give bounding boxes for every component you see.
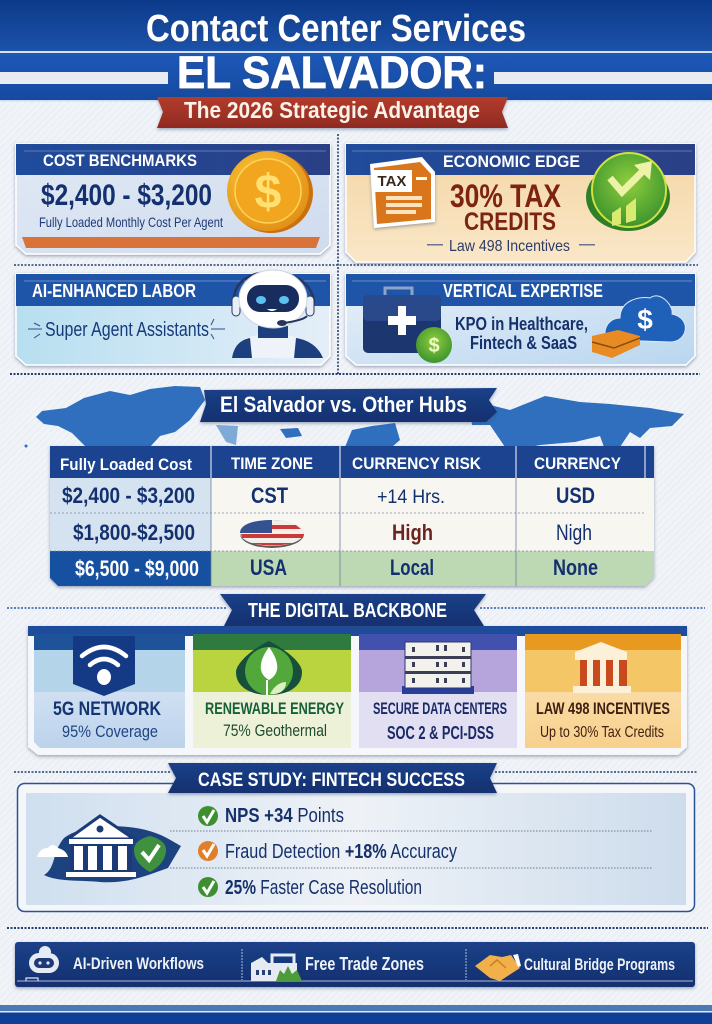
- expertise text line two: Fintech & SaaS: [470, 333, 577, 353]
- icon: tax document: TAX: [378, 173, 406, 190]
- card: secure data centers: SECURE DATA CENTERS: [373, 699, 507, 718]
- table row one: CST: [251, 483, 288, 508]
- table row two: Nigh: [556, 520, 592, 545]
- label: free trade zones: Free Trade Zones: [305, 954, 424, 974]
- table header: CURRENCY: [534, 454, 622, 473]
- icon: green growth badge: [586, 153, 670, 231]
- table row two: $1,800-$2,500: [73, 520, 195, 545]
- result: fraud detection: Fraud Detection +18% Accuracy: [225, 841, 457, 863]
- table header: CURRENCY RISK: [352, 454, 482, 473]
- table header: [60, 454, 622, 474]
- table row three: [75, 555, 598, 581]
- icon: USA flag: [240, 520, 304, 548]
- banner: comparison heading: [200, 388, 497, 422]
- super agent text: Super Agent Assistants: [45, 319, 209, 341]
- cost value: $2,400 - $3,200: [41, 179, 212, 212]
- card: 5G network: 95% Coverage: [62, 722, 158, 741]
- heading: AI-enhanced labor: AI-ENHANCED LABOR: [32, 281, 196, 301]
- card: law 498 incentives: LAW 498 INCENTIVES: [536, 699, 670, 718]
- icon: handshake: [475, 954, 521, 981]
- world map: [24, 386, 684, 448]
- table row two: High: [392, 520, 433, 545]
- bottom band: [0, 1005, 712, 1024]
- icon: robot: [26, 946, 59, 981]
- panel: economic edge: [346, 144, 695, 262]
- panel: case study: [18, 784, 694, 912]
- card: 5G network: 5G NETWORK: [53, 699, 161, 720]
- sparkle marks: [28, 319, 225, 339]
- panel: vertical expertise: [346, 274, 695, 365]
- title: Contact Center Services: [146, 8, 526, 50]
- table header: TIME ZONE: [231, 454, 313, 473]
- table row two: [73, 520, 592, 545]
- tax credit value: 30% TAX: [450, 178, 562, 214]
- banner: digital backbone: [220, 594, 486, 626]
- comparison table: [50, 446, 654, 586]
- expertise text line one: KPO in Healthcare,: [455, 314, 588, 334]
- table row one: $2,400 - $3,200: [62, 483, 195, 508]
- table row three: None: [553, 555, 598, 580]
- card: law 498 incentives: [525, 634, 681, 748]
- panel: cost benchmarks: [16, 144, 330, 254]
- heading: vertical expertise: VERTICAL EXPERTISE: [443, 281, 603, 301]
- card: 5G network: [34, 634, 185, 748]
- icon: orange server stack: [592, 330, 640, 358]
- card: renewable energy: 75% Geothermal: [223, 721, 327, 740]
- table row one: USD: [556, 483, 595, 508]
- subtitle: El Salvador: EL SALVADOR:: [177, 47, 487, 98]
- icon: leaf badge: [236, 641, 302, 695]
- table row one: [62, 483, 595, 508]
- footer bar: [15, 942, 695, 987]
- heading: economic edge: ECONOMIC EDGE: [443, 152, 580, 171]
- icon: bank with shield: [37, 816, 181, 882]
- card: secure data centers: [359, 634, 517, 748]
- icon: wifi shield: [73, 636, 135, 696]
- header band: [0, 0, 712, 102]
- icon: cloud with dollar: $: [637, 304, 653, 335]
- card: secure data centers: SOC 2 & PCI-DSS: [387, 723, 494, 743]
- icon: gold coin: $: [255, 166, 282, 219]
- icon: government building: [573, 642, 631, 693]
- tax credit value line two: CREDITS: [464, 208, 556, 236]
- label: AI-driven workflows: AI-Driven Workflows: [73, 954, 204, 973]
- icon: tax document: [370, 157, 435, 228]
- table row three: Local: [390, 555, 434, 580]
- card: renewable energy: RENEWABLE ENERGY: [205, 699, 344, 718]
- icon: server rack: [402, 642, 474, 694]
- panel: AI-enhanced labor: [16, 270, 330, 365]
- heading: cost benchmarks: COST BENCHMARKS: [43, 151, 197, 170]
- icon: cloud with dollar: [605, 296, 685, 342]
- banner: case study: [168, 763, 497, 793]
- card: renewable energy: [193, 634, 351, 748]
- table row one: +14 Hrs.: [377, 487, 445, 508]
- icon: medical briefcase: $: [428, 335, 440, 357]
- icon: factory: [251, 955, 302, 981]
- table row three: $6,500 - $9,000: [75, 556, 199, 581]
- table row three: USA: [250, 555, 287, 580]
- icon: gold coin: [227, 151, 313, 233]
- dotted dividers: [7, 134, 708, 928]
- banner: comparison heading: El Salvador vs. Other Hubs: [220, 392, 467, 417]
- result: NPS: NPS +34 Points: [225, 805, 344, 827]
- icon: medical briefcase: [363, 288, 452, 363]
- panel: digital backbone: [28, 626, 687, 755]
- cost caption: Fully Loaded Monthly Cost Per Agent: [39, 214, 223, 230]
- banner: digital backbone: THE DIGITAL BACKBONE: [248, 600, 447, 622]
- law caption: Law 498 Incentives: [449, 238, 570, 255]
- icon: robot agent: [232, 270, 323, 358]
- banner: case study: CASE STUDY: FINTECH SUCCESS: [198, 770, 465, 791]
- result: case resolution: 25% Faster Case Resolution: [225, 877, 422, 899]
- table header: Fully Loaded Cost: [60, 455, 192, 474]
- ribbon: strategic advantage: The 2026 Strategic Advantage: [184, 97, 480, 123]
- card: law 498 incentives: Up to 30% Tax Credits: [540, 724, 664, 741]
